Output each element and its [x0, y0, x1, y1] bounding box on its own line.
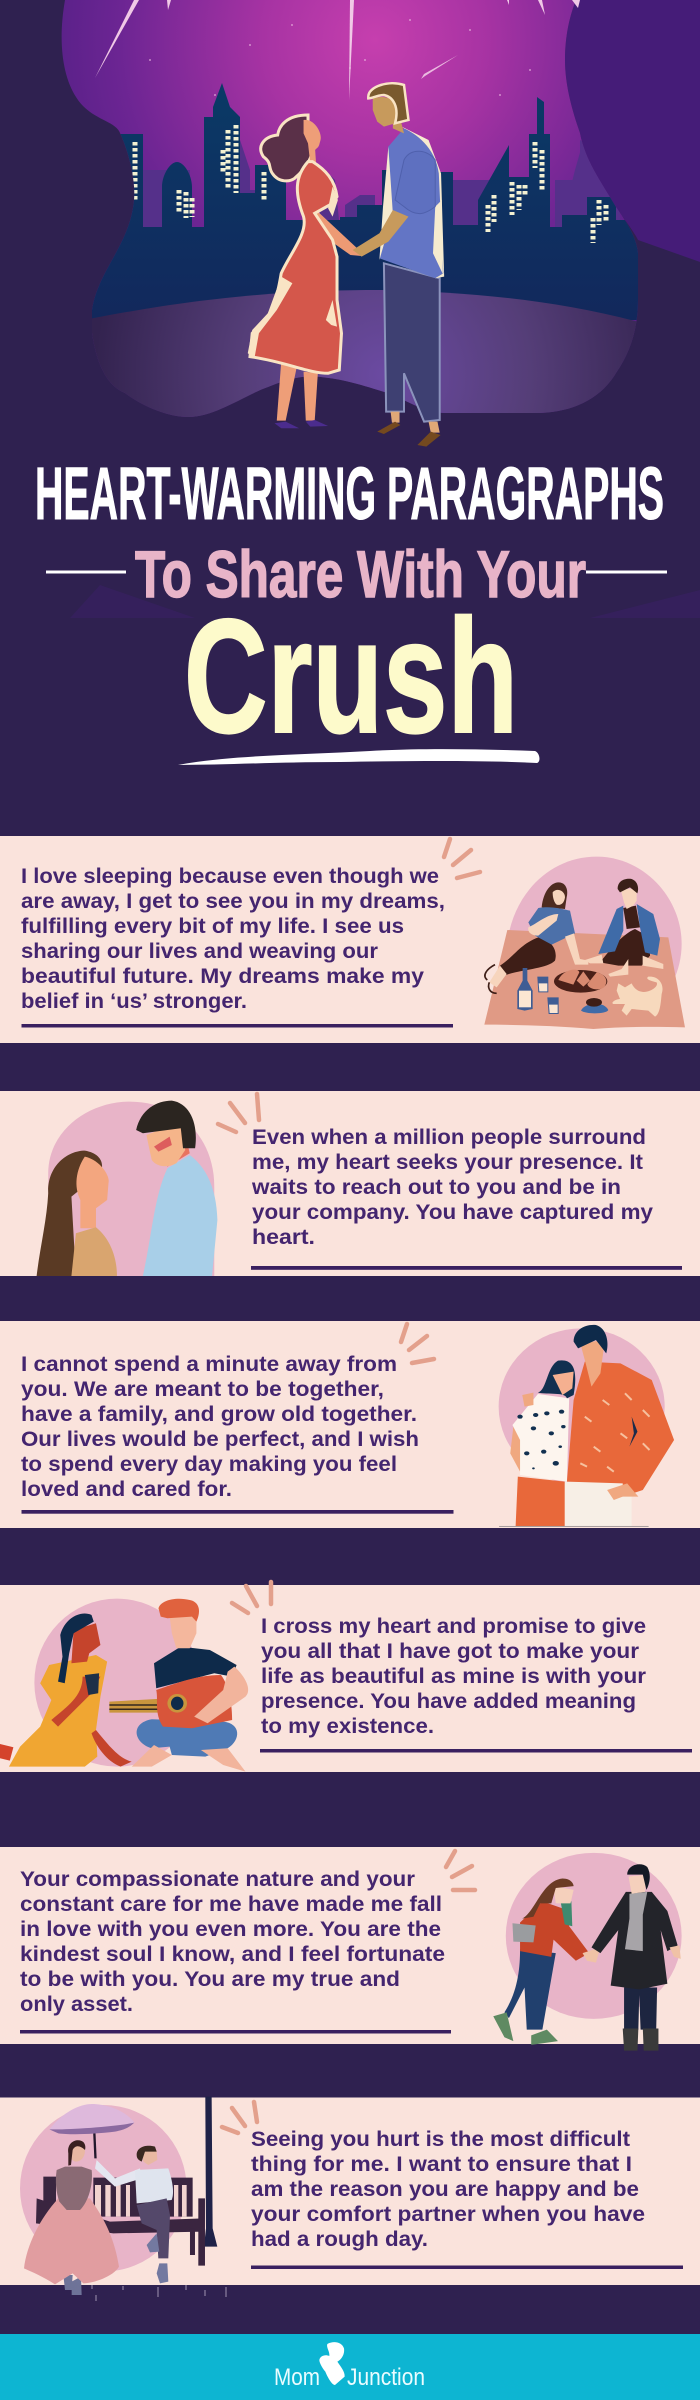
bench and umbrella illustration [20, 2097, 217, 2295]
arm near chest [528, 914, 558, 936]
plate with food [554, 970, 607, 993]
sweater dark side [629, 1417, 637, 1447]
logo text right: Junction [347, 2364, 425, 2391]
paragraph: I love sleeping because even though we [21, 864, 439, 888]
accent marks [444, 839, 480, 878]
panel background [0, 2098, 700, 2285]
picnic couple illustration [484, 857, 685, 1029]
woman's shoes [493, 2012, 558, 2045]
figures [248, 83, 444, 447]
bench back [43, 2177, 193, 2217]
paragraph: waits to reach out to you and be in [251, 1175, 621, 1199]
woman's hand on shoulder [522, 1393, 533, 1407]
dark legs [600, 929, 650, 966]
paragraph: beautiful future. My dreams make my [21, 964, 424, 988]
bottle [517, 968, 533, 1011]
torso [623, 906, 640, 929]
woman's hair [538, 1360, 575, 1398]
woman's phone [85, 1673, 99, 1695]
support arm [565, 933, 588, 965]
face [146, 1122, 185, 1166]
man's hands [670, 1945, 681, 1959]
bench seat [36, 2198, 204, 2233]
paragraph [261, 1614, 647, 1738]
man's feet [132, 1745, 246, 1772]
right background shape [565, 0, 700, 262]
guitar body [156, 1675, 232, 1728]
woman [485, 882, 588, 993]
blush [154, 1137, 172, 1152]
sky [50, 0, 650, 430]
man's pants [565, 1482, 632, 1527]
divider [251, 1266, 682, 1270]
man [136, 1101, 217, 1276]
man pants [384, 263, 440, 422]
right rule [586, 570, 667, 574]
woman's forearm [51, 1677, 100, 1727]
hair [136, 1101, 196, 1148]
panel 6 [0, 2097, 700, 2301]
panel 4 [0, 1582, 700, 1772]
pink circle [20, 2105, 187, 2272]
paragraph: to my existence. [261, 1714, 434, 1738]
man [585, 879, 663, 977]
hero illustration: couple and city skyline [50, 0, 700, 618]
pink arch [507, 857, 682, 981]
jacket left [598, 906, 623, 954]
paragraph: had a rough day. [251, 2227, 428, 2251]
accent marks [218, 1094, 259, 1132]
divider [20, 2030, 451, 2034]
embracing couple illustration [499, 1325, 674, 1527]
paragraph: me, my heart seeks your presence. It [252, 1150, 643, 1174]
back buildings [135, 135, 620, 230]
paragraph: I cross my heart and promise to give [261, 1614, 646, 1638]
cat [612, 977, 663, 1017]
paragraph: only asset. [20, 1992, 133, 2016]
hair [542, 882, 567, 909]
shooting stars [95, 0, 580, 100]
paragraph: Our lives would be perfect, and I wish [21, 1427, 419, 1451]
hair [618, 879, 638, 893]
man's sweater [567, 1362, 674, 1497]
divider [22, 1024, 453, 1028]
logo figure [319, 2342, 345, 2385]
man's arm [95, 2160, 142, 2187]
woman's feet [63, 2275, 82, 2295]
paragraph [21, 864, 445, 1013]
paragraph: sharing our lives and weaving our [21, 939, 379, 963]
neck [163, 1133, 190, 1167]
bench slats [95, 2185, 187, 2217]
feet [585, 955, 663, 977]
woman's scarf [560, 1900, 572, 1926]
woman's skirt [24, 2198, 119, 2284]
woman's head [68, 2142, 85, 2162]
shirt cream edge [379, 127, 444, 278]
man's tee [154, 1647, 237, 1688]
shirt [528, 907, 575, 945]
couple face to face illustration [37, 1101, 217, 1276]
paragraph: Even when a million people surround [252, 1125, 646, 1149]
walking couple illustration [493, 1853, 682, 2051]
panel background [0, 1585, 700, 1772]
paragraph: Your compassionate nature and your [20, 1867, 416, 1891]
paragraph [251, 2127, 645, 2251]
woman's bodice [56, 2167, 92, 2210]
divider [22, 1510, 454, 1514]
man sleeve [395, 151, 435, 214]
man's legs [137, 1719, 237, 1757]
woman's face [554, 1886, 574, 1903]
paragraph: am the reason you are happy and be [251, 2177, 639, 2201]
paragraph: Seeing you hurt is the most difficult [251, 2127, 630, 2151]
accent marks [222, 2102, 257, 2133]
paragraph: heart. [252, 1225, 315, 1249]
panel 3 [0, 1321, 700, 1528]
panel background [0, 1847, 700, 2044]
dress highlights [248, 187, 338, 358]
man [353, 83, 444, 447]
man's hair [627, 1864, 650, 1890]
title line 3: Crush: Crush [184, 586, 518, 767]
pink circle [506, 1853, 682, 2019]
woman's dress [9, 1655, 107, 1767]
man's shoes [147, 2233, 168, 2283]
bowl [581, 1004, 608, 1013]
panel background [0, 836, 700, 1043]
bench [36, 2177, 205, 2266]
panel background [0, 1321, 700, 1528]
paragraph [21, 1352, 419, 1501]
bench legs [190, 2198, 205, 2266]
man's scarf [625, 1892, 647, 1951]
rain streaks [92, 2285, 226, 2301]
night sky scene [50, 0, 650, 430]
man's face [629, 1875, 646, 1894]
hair [37, 1151, 102, 1276]
blanket [484, 930, 685, 1029]
woman's jeans [504, 1949, 556, 2030]
jacket right [637, 904, 660, 956]
paragraph: you all that I have got to make your [261, 1639, 640, 1663]
paragraph: are away, I get to see you in my dreams, [21, 889, 445, 913]
shirt [71, 1227, 117, 1276]
logo text left: Mom [274, 2364, 320, 2391]
man ankles [391, 412, 440, 433]
paragraph: to spend every day making you feel [21, 1452, 397, 1476]
woman [248, 115, 362, 428]
man's face [170, 1613, 196, 1648]
divider [251, 2266, 683, 2269]
guitar hole [167, 1694, 187, 1713]
man's coat [591, 1892, 678, 1989]
teal background [0, 2334, 700, 2400]
man's boots [623, 2028, 658, 2051]
divider [260, 1749, 692, 1752]
man's legs [624, 1988, 657, 2030]
man's hair [137, 2146, 157, 2162]
glasses [537, 977, 548, 992]
man's hair [158, 1599, 199, 1622]
accent marks [232, 1582, 271, 1613]
pink arch [48, 1102, 214, 1276]
woman's hair [58, 1614, 94, 1683]
navy skyline [60, 83, 650, 320]
ground line [499, 1525, 649, 1528]
man's head [142, 2150, 157, 2165]
paragraph: kindest soul I know, and I feel fortunate [20, 1942, 445, 1966]
face [553, 890, 565, 905]
guitar couple illustration [0, 1599, 248, 1772]
paragraph: I cannot spend a minute away from [21, 1352, 397, 1376]
paragraph: in love with you even more. You are the [20, 1917, 441, 1941]
panel 1 [0, 836, 700, 1043]
woman legs [277, 362, 297, 421]
paragraph: belief in ‘us’ stronger. [21, 989, 247, 1013]
accent marks [401, 1324, 434, 1363]
woman face [304, 120, 321, 163]
panel 2 [0, 1091, 700, 1276]
tee dots [517, 1410, 566, 1469]
man's arm [194, 1667, 248, 1723]
panel background [0, 1091, 700, 1276]
paragraph: fulfilling every bit of my life. I see us [21, 914, 404, 938]
woman's pants [516, 1477, 565, 1527]
woman's tee [512, 1394, 569, 1482]
man hair [368, 83, 408, 123]
woman's arm [92, 1730, 132, 1767]
man's shirt [135, 2168, 173, 2203]
woman's jacket [520, 1901, 589, 1961]
face and neck [76, 1157, 109, 1228]
footer band [0, 2334, 700, 2400]
title line 2 [46, 537, 667, 611]
paragraph [20, 1867, 445, 2016]
panel 5 [0, 1847, 700, 2051]
woman's arm [510, 1427, 525, 1472]
pink ellipse [34, 1599, 200, 1767]
woman's face [553, 1372, 574, 1395]
paragraph: life as beautiful as mine is with your [261, 1664, 647, 1688]
ground [92, 290, 636, 417]
left rule [46, 570, 126, 574]
paragraph: presence. You have added meaning [261, 1689, 636, 1713]
paragraph: have a family, and grow old together. [21, 1402, 417, 1426]
hand [607, 1483, 638, 1500]
legs [500, 937, 556, 976]
sweater marks [580, 1393, 650, 1472]
woman's hair [68, 2140, 85, 2166]
woman shoes [275, 420, 328, 428]
woman's bag [512, 1923, 536, 1942]
man's neck and face [580, 1340, 605, 1387]
city windows [135, 125, 606, 243]
woman's face and neck [71, 1623, 100, 1663]
umbrella pole [93, 2122, 97, 2158]
woman dress [250, 162, 341, 373]
paragraph [251, 1125, 653, 1249]
man's hair [574, 1325, 608, 1353]
man shirt [379, 128, 443, 278]
accent marks [446, 1851, 475, 1890]
woman arm [310, 207, 362, 256]
face [621, 889, 637, 909]
paragraph: you. We are meant to be together, [21, 1377, 384, 1401]
lamp post [204, 2097, 217, 2247]
man's legs [137, 2198, 170, 2258]
guitar neck [109, 1698, 170, 1713]
man arm [353, 210, 408, 257]
man shoes [377, 422, 441, 447]
paragraph: loved and cared for. [21, 1477, 232, 1501]
woman [37, 1151, 117, 1276]
pink ellipse [499, 1328, 665, 1485]
paragraph: to be with you. You are my true and [20, 1967, 400, 1991]
joined hands [583, 1947, 600, 1963]
woman's hair [522, 1878, 574, 1919]
faint lower shapes [70, 585, 700, 618]
stars [149, 19, 531, 96]
paragraph: thing for me. I want to ensure that I [251, 2152, 632, 2176]
paragraph: constant care for me have made me fall [20, 1892, 442, 1916]
umbrella canopy [49, 2104, 134, 2133]
foot and sandal [489, 966, 507, 987]
brush underline [178, 749, 539, 765]
paragraph: your comfort partner when you have [251, 2202, 645, 2226]
man face [373, 97, 404, 133]
paragraph: your company. You have captured my [252, 1200, 653, 1224]
red foot [0, 1744, 13, 1761]
umbrella shadow [49, 2123, 134, 2134]
shirt [143, 1155, 217, 1276]
woman hair [261, 115, 312, 181]
